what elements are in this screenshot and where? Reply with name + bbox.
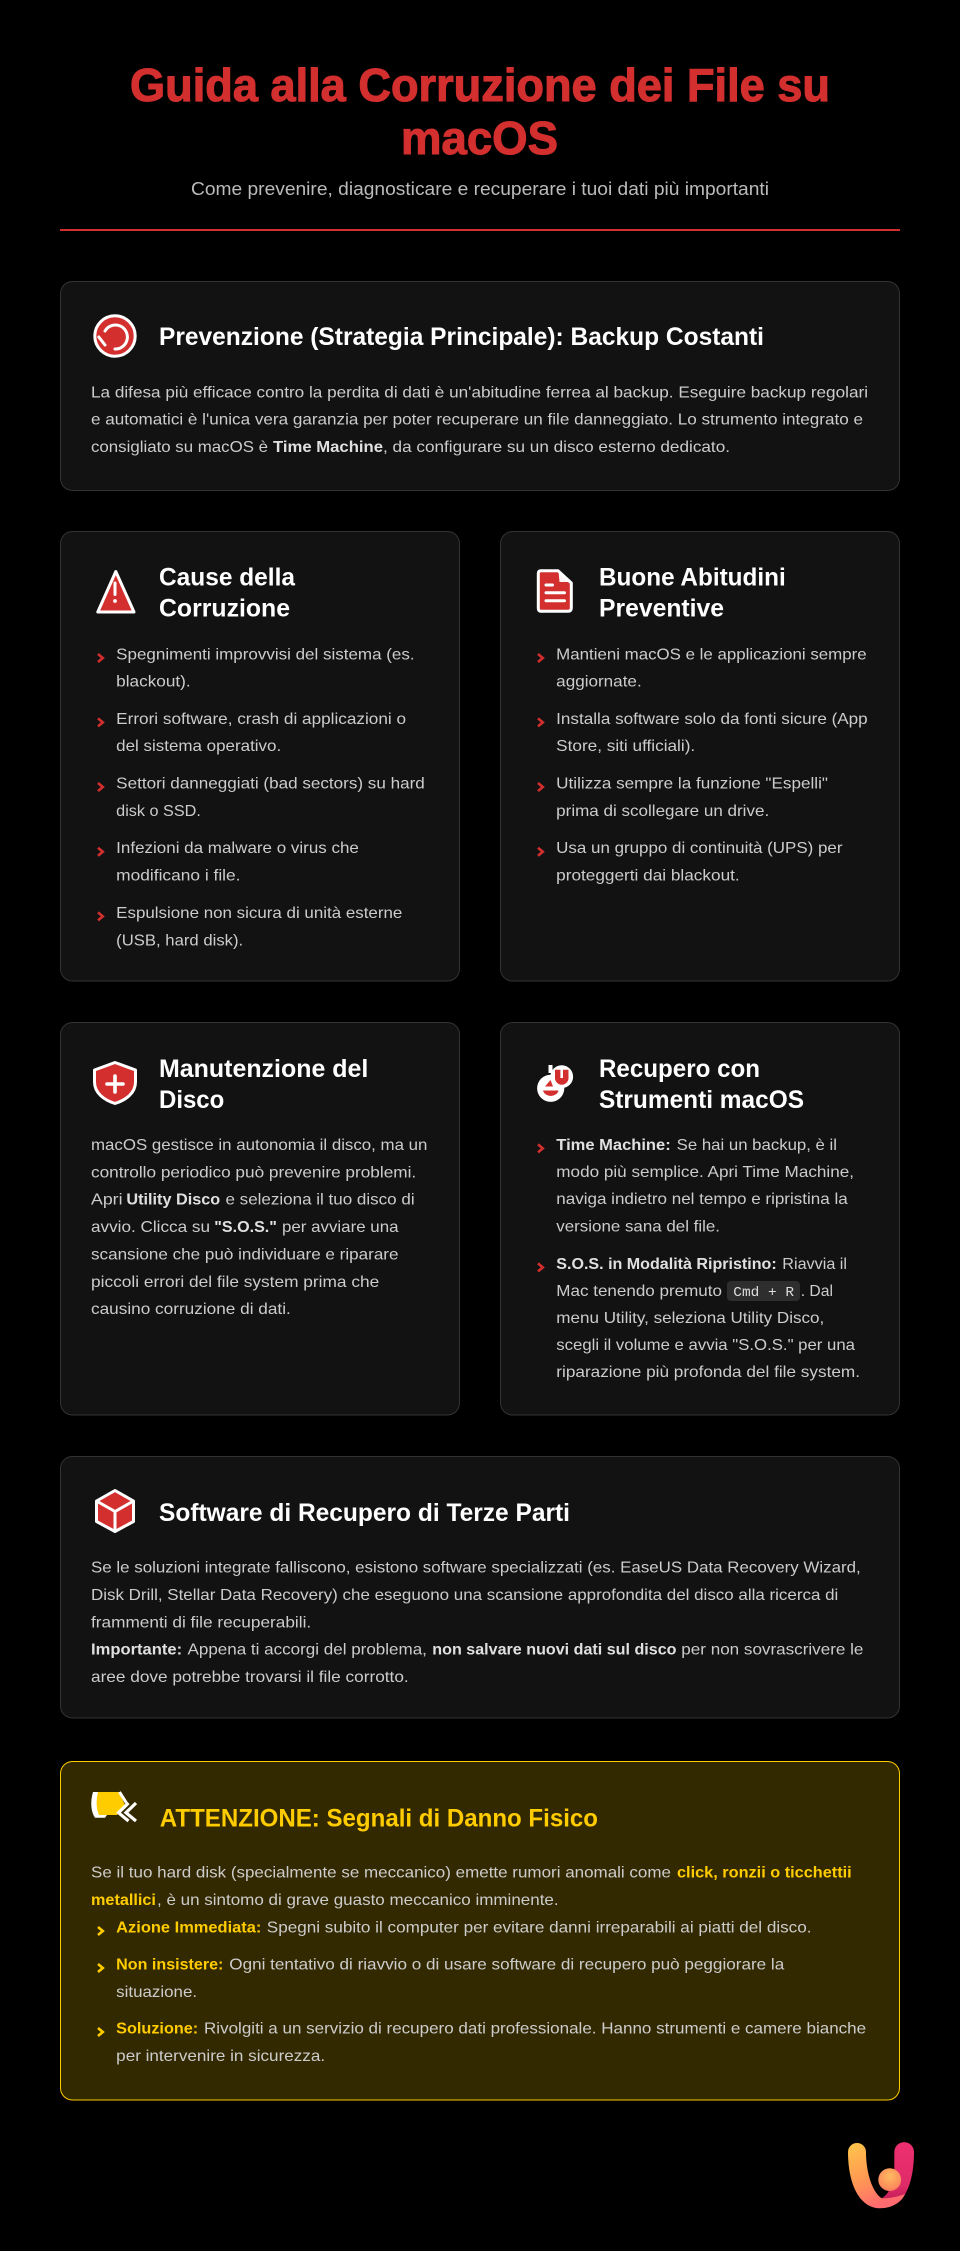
list: cause: Settori danneggiati (bad sectors) su hard <box>116 775 425 792</box>
logo <box>848 2142 914 2208</box>
heading: recupero: Recupero con <box>599 1055 760 1083</box>
heading: buone abitudini <box>599 564 786 623</box>
list: recupero: riparazione più profonda del file system. <box>556 1364 860 1381</box>
heading: cause: Corruzione <box>159 595 290 623</box>
list: recupero: Se hai un backup, è il <box>677 1137 837 1154</box>
list: buone abitudini: Installa software solo da fonti sicure (App <box>556 711 868 728</box>
text: software body: non salvare nuovi dati sul disco <box>432 1642 677 1659</box>
list: cause: (USB, hard disk). <box>116 932 243 949</box>
title <box>130 59 830 164</box>
heading: manutenzione: Manutenzione del <box>159 1055 368 1083</box>
list: cause: Infezioni da malware o virus che <box>116 840 359 857</box>
heading: recupero <box>599 1055 804 1114</box>
list: buone abitudini: Store, siti ufficiali). <box>556 738 695 755</box>
heading: buone abitudini: Preventive <box>599 595 724 623</box>
text: software body: Disk Drill, Stellar Data Recovery) che eseguono una scansione approfondita del disco alla ricerca di <box>91 1587 838 1604</box>
list: recupero: menu Utility, seleziona Utility Disco, <box>556 1310 824 1327</box>
icon: shield with plus <box>94 1062 136 1104</box>
text: prevenzione body: e automatici è l'unica vera garanzia per poter recuperare un file danneggiato. Lo strumento integrato e <box>91 412 863 429</box>
icon: warning sound <box>91 1792 136 1821</box>
list: recupero: S.O.S. in Modalità Ripristino: <box>556 1256 777 1273</box>
list: attenzione: situazione. <box>116 1984 197 2001</box>
heading: attenzione: ATTENZIONE: Segnali di Danno Fisico <box>160 1805 598 1833</box>
list: attenzione: Ogni tentativo di riavvio o di usare software di recupero può peggiorare la <box>229 1956 784 1973</box>
list: recupero: Time Machine: <box>556 1137 671 1154</box>
text: software body: Appena ti accorgi del problema, <box>188 1642 427 1659</box>
text: manutenzione body: avvio. Clicca su <box>91 1219 210 1236</box>
list: recupero: Mac tenendo premuto <box>556 1283 722 1300</box>
heading: buone abitudini: Buone Abitudini <box>599 564 786 592</box>
text: software body: per non sovrascrivere le <box>681 1642 864 1659</box>
text: manutenzione body: piccoli errori del file system prima che <box>91 1274 379 1291</box>
list: recupero: versione sana del file. <box>556 1218 720 1236</box>
list: buone abitudini: proteggerti dai blackout. <box>556 868 740 884</box>
list: attenzione: Azione Immediata: <box>116 1919 261 1936</box>
key: Cmd + R: Cmd + R <box>733 1286 794 1301</box>
text: attenzione intro: metallici <box>91 1892 156 1909</box>
list: recupero: naviga indietro nel tempo e ripristina la <box>556 1191 848 1208</box>
panel: recupero con strumenti macOS <box>500 1022 900 1415</box>
text: attenzione intro: Se il tuo hard disk (specialmente se meccanico) emette rumori anomali come <box>91 1864 671 1882</box>
list: cause: Espulsione non sicura di unità esterne <box>116 905 402 922</box>
text: software body: Importante: <box>91 1642 182 1659</box>
text: manutenzione body <box>91 1137 427 1318</box>
text: manutenzione body: Utility Disco <box>126 1192 220 1209</box>
list: buone abitudini: aggiornate. <box>556 674 642 690</box>
text: manutenzione body: "S.O.S." <box>214 1219 277 1236</box>
list: attenzione: per intervenire in sicurezza. <box>116 2048 325 2065</box>
icon: cube <box>96 1490 134 1532</box>
icon: backup circular arrow <box>95 316 135 356</box>
panel: software di recupero <box>60 1456 900 1718</box>
text: manutenzione body: per avviare una <box>282 1219 399 1236</box>
text: prevenzione body <box>91 384 868 456</box>
list: attenzione <box>98 1919 866 2065</box>
text: prevenzione body: , da configurare su un disco esterno dedicato. <box>383 439 730 456</box>
panel: prevenzione <box>60 282 900 490</box>
list: buone abitudini <box>538 646 868 884</box>
list: cause: blackout). <box>116 674 191 690</box>
text: manutenzione body: macOS gestisce in autonomia il disco, ma un <box>91 1137 427 1154</box>
text: manutenzione body: scansione che può individuare e riparare <box>91 1246 399 1263</box>
heading: cause: Cause della <box>159 564 296 592</box>
text: attenzione intro: click, ronzii o ticchettii <box>677 1864 852 1882</box>
text: software body: frammenti di file recuperabili. <box>91 1614 311 1631</box>
list: recupero: . Dal <box>801 1283 833 1300</box>
list: buone abitudini: prima di scollegare un drive. <box>556 803 769 820</box>
list: recupero: scegli il volume e avvia "S.O.S." per una <box>556 1337 855 1354</box>
list: attenzione: Spegni subito il computer per evitare danni irreparabili ai piatti del disco. <box>267 1919 812 1936</box>
list: cause: disk o SSD. <box>116 803 201 820</box>
list: buone abitudini: Utilizza sempre la funzione "Espelli" <box>556 775 828 792</box>
text: manutenzione body: e seleziona il tuo disco di <box>226 1192 415 1209</box>
panel: buone abitudini preventive <box>500 532 900 981</box>
text: software body: aree dove potrebbe trovarsi il file corrotto. <box>91 1669 409 1686</box>
list: cause: Spegnimenti improvvisi del sistema (es. <box>116 646 415 663</box>
list: recupero <box>538 1137 860 1381</box>
icon: document <box>538 571 571 611</box>
subtitle: Come prevenire, diagnosticare e recuperare i tuoi dati più importanti <box>191 178 769 199</box>
text: software body: Se le soluzioni integrate falliscono, esistono software specializzati (es. EaseUS Data Recovery Wizard, <box>91 1560 861 1577</box>
text: prevenzione body: consigliato su macOS è <box>91 439 268 456</box>
text: attenzione intro <box>91 1864 852 1909</box>
header <box>60 59 900 231</box>
panel: attenzione <box>60 1762 900 2100</box>
header rule <box>60 229 900 231</box>
list: buone abitudini: Usa un gruppo di continuità (UPS) per <box>556 840 843 857</box>
key: Cmd + R <box>727 1281 800 1301</box>
panel: cause della corruzione <box>60 532 460 981</box>
list: attenzione: Rivolgiti a un servizio di recupero dati professionale. Hanno strumenti e camere bianche <box>204 2020 866 2038</box>
icon: recovery tools <box>537 1065 573 1102</box>
text: manutenzione body: causino corruzione di dati. <box>91 1301 291 1318</box>
list: cause: modificano i file. <box>116 868 240 884</box>
text: prevenzione body: Time Machine <box>273 439 383 456</box>
list: cause: del sistema operativo. <box>116 738 281 755</box>
heading: prevenzione: Prevenzione (Strategia Principale): Backup Costanti <box>159 323 764 351</box>
title: Guida alla Corruzione dei File su <box>130 59 830 111</box>
icon: warning triangle <box>98 572 134 612</box>
heading: manutenzione: Disco <box>159 1086 224 1114</box>
text: manutenzione body: controllo periodico può prevenire problemi. <box>91 1164 416 1181</box>
title: macOS <box>401 112 558 164</box>
list: cause: Errori software, crash di applicazioni o <box>116 711 406 728</box>
list: attenzione: Soluzione: <box>116 2020 198 2038</box>
list: recupero: Riavvia il <box>782 1256 847 1273</box>
list: buone abitudini: Mantieni macOS e le applicazioni sempre <box>556 646 867 663</box>
heading: cause <box>159 564 296 623</box>
panel: manutenzione del disco <box>60 1022 460 1415</box>
heading: recupero: Strumenti macOS <box>599 1086 804 1114</box>
text: manutenzione body: Apri <box>91 1192 122 1209</box>
list: recupero: modo più semplice. Apri Time Machine, <box>556 1164 854 1181</box>
text: prevenzione body: La difesa più efficace contro la perdita di dati è un'abitudine ferrea al backup. Eseguire backup regolari <box>91 384 868 402</box>
list: cause <box>98 646 425 949</box>
heading: software: Software di Recupero di Terze Parti <box>159 1499 570 1527</box>
list: attenzione: Non insistere: <box>116 1956 223 1973</box>
heading: manutenzione <box>159 1055 368 1114</box>
text: software body <box>91 1560 864 1686</box>
text: attenzione intro: , è un sintomo di grave guasto meccanico imminente. <box>157 1892 559 1909</box>
